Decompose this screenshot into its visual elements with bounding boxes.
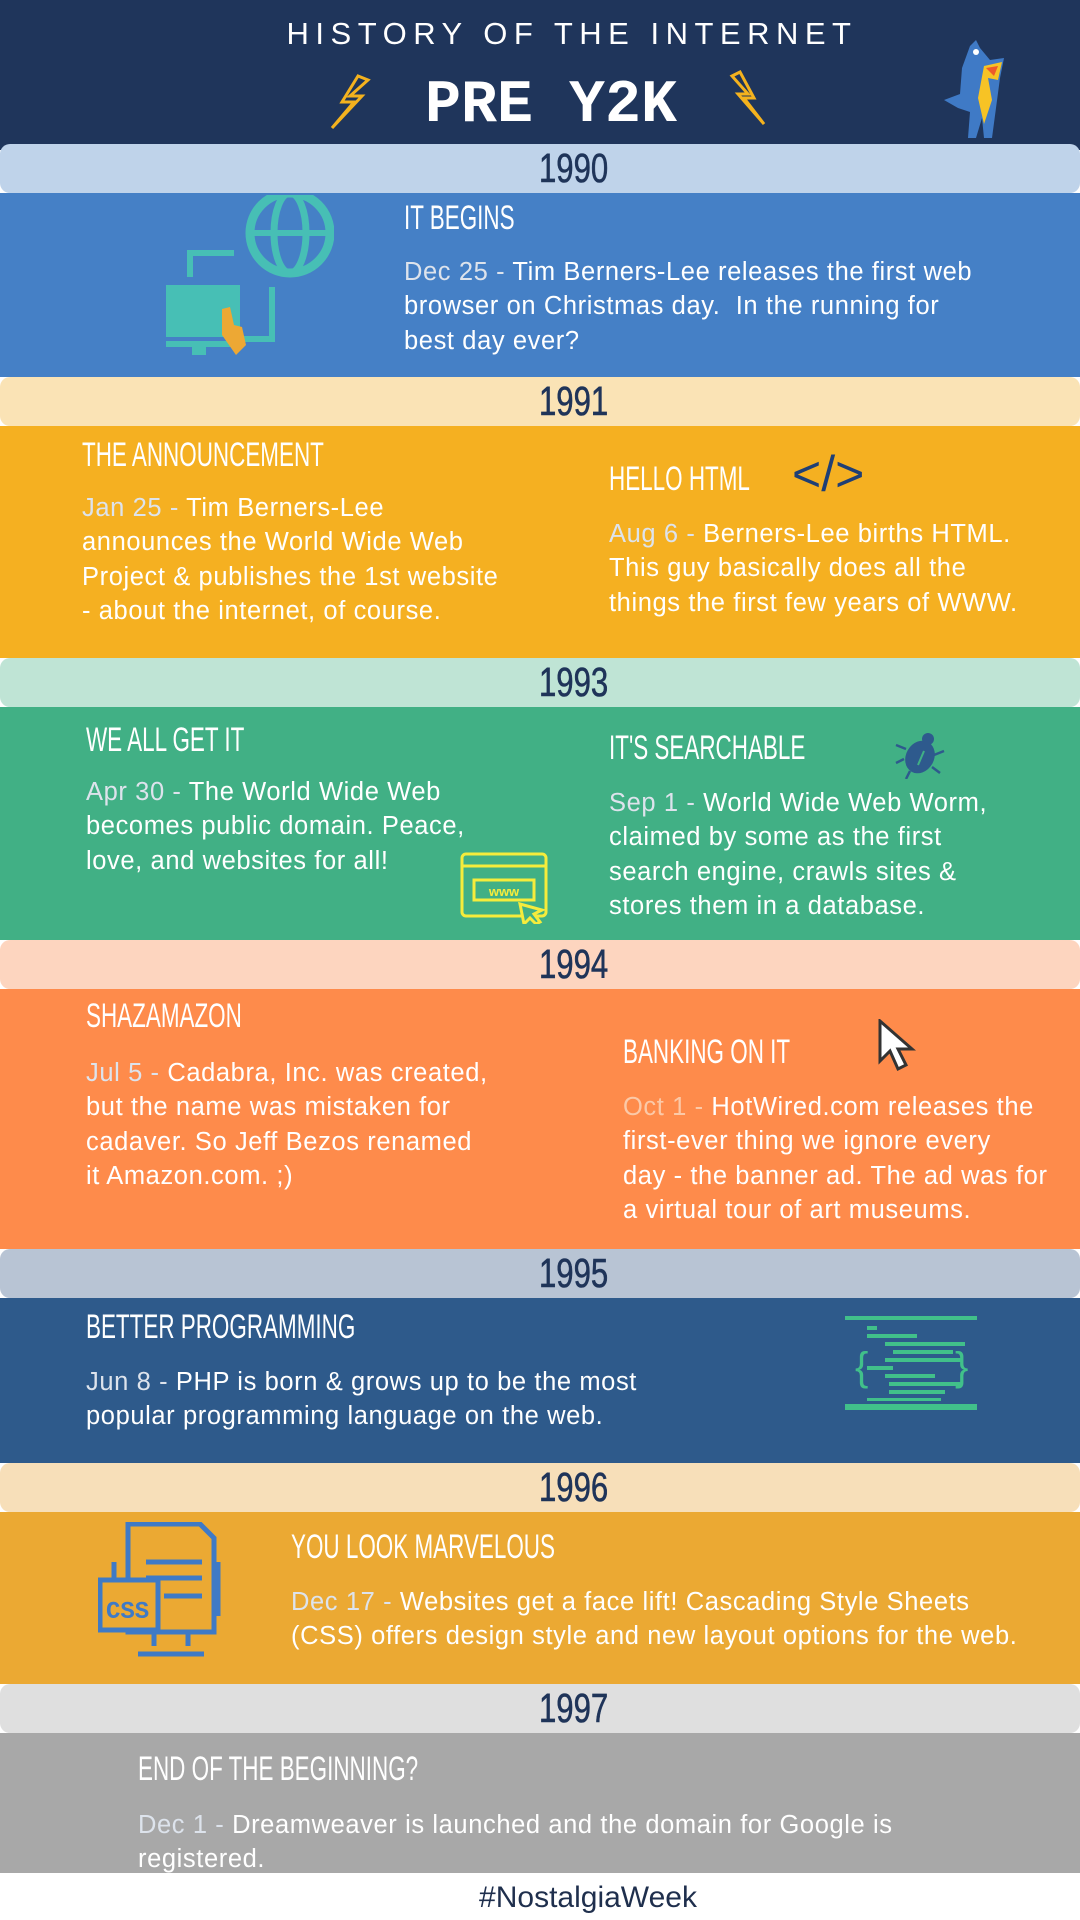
text block: announcement <box>82 494 498 625</box>
footer hashtag: #NostalgiaWeek <box>479 1881 697 1914</box>
text block: html: things the first few years of WWW. <box>609 589 1018 617</box>
heading: end of the beginning: END OF THE BEGINNING? <box>138 1750 418 1788</box>
icon: bug <box>896 733 944 779</box>
text block: banner ad <box>623 1093 1048 1224</box>
band: 1990: 1990 <box>539 145 609 191</box>
icon: cursor <box>878 1019 916 1071</box>
title: HISTORY OF THE INTERNET <box>287 16 857 51</box>
band: 1996 <box>0 1463 1080 1512</box>
panel: 1995 <box>0 1298 1080 1463</box>
band: 1991 <box>0 377 1080 426</box>
icon: www browser <box>460 852 548 924</box>
text block: dreamweaver <box>138 1811 893 1873</box>
heading: the announcement: THE ANNOUNCEMENT <box>82 436 324 474</box>
icon: code editor: } <box>955 1345 968 1389</box>
band: 1990 <box>0 144 1080 193</box>
text block: banner ad: a virtual tour of art museums. <box>623 1196 971 1224</box>
heading: shazamazon: SHAZAMAZON <box>86 997 242 1035</box>
heading: it's searchable: IT'S SEARCHABLE <box>609 729 805 767</box>
heading: we all get it: WE ALL GET IT <box>86 721 244 759</box>
icon: lightning left <box>330 74 371 129</box>
text block: announcement: - about the internet, of course. <box>82 597 441 625</box>
text block: css <box>291 1588 1017 1650</box>
text block: public domain: Apr 30 - The World Wide Web <box>86 778 441 806</box>
text block: css: (CSS) offers design style and new layout options for the web. <box>291 1622 1017 1650</box>
text block: banner ad: first-ever thing we ignore every <box>623 1127 991 1155</box>
icon: code editor: { <box>855 1345 868 1389</box>
band: 1997 <box>0 1684 1080 1733</box>
text block: amazon: it Amazon.com. ;) <box>86 1162 293 1190</box>
text block: html <box>609 520 1018 617</box>
heading: better programming: BETTER PROGRAMMING <box>86 1308 355 1346</box>
text block: web worm: search engine, crawls sites & <box>609 858 957 886</box>
text block: dreamweaver: Dec 1 - Dreamweaver is launched and the domain for Google is <box>138 1811 893 1839</box>
text block: 1990: browser on Christmas day. In the running for <box>404 292 939 320</box>
panel: 1996 <box>0 1512 1080 1684</box>
text block: amazon: cadaver. So Jeff Bezos renamed <box>86 1128 472 1156</box>
text block: public domain: becomes public domain. Peace, <box>86 812 465 840</box>
text block: announcement: announces the World Wide Web <box>82 528 464 556</box>
text block: announcement: Project & publishes the 1st website <box>82 563 498 591</box>
panel: 1993 <box>0 707 1080 940</box>
band: 1996: 1996 <box>539 1464 609 1510</box>
icon: code editor <box>845 1316 977 1410</box>
text block: banner ad: day - the banner ad. The ad was for <box>623 1162 1048 1190</box>
band: 1991: 1991 <box>539 378 609 424</box>
icon: www browser: www <box>488 884 520 899</box>
text block: dreamweaver: registered. <box>138 1845 265 1873</box>
band: 1997: 1997 <box>539 1685 609 1731</box>
band: 1993 <box>0 658 1080 707</box>
text block: html: Aug 6 - Berners-Lee births HTML. <box>609 520 1011 548</box>
icon: css document <box>98 1522 220 1656</box>
header <box>0 0 1080 150</box>
text block: amazon: Jul 5 - Cadabra, Inc. was created, <box>86 1059 488 1087</box>
icon: mascot <box>944 40 1004 138</box>
text block: web worm: claimed by some as the first <box>609 823 942 851</box>
text block: banner ad: Oct 1 - HotWired.com releases the <box>623 1093 1034 1121</box>
text block: web worm: Sep 1 - World Wide Web Worm, <box>609 789 987 817</box>
panel: 1997 <box>0 1733 1080 1873</box>
text block: web worm <box>609 789 987 920</box>
panel: 1994 <box>0 989 1080 1249</box>
text block: announcement: Jan 25 - Tim Berners-Lee <box>82 494 384 522</box>
text block: css: Dec 17 - Websites get a face lift! Cascading Style Sheets <box>291 1588 970 1616</box>
icon: lightning right <box>730 70 766 125</box>
icon: computer and globe <box>166 195 334 355</box>
band: 1994: 1994 <box>539 941 609 987</box>
heading: banking on it: BANKING ON IT <box>623 1033 790 1071</box>
panel: 1990 <box>0 193 1080 377</box>
band: 1995: 1995 <box>539 1250 609 1296</box>
text block: public domain <box>86 778 465 875</box>
heading: you look marvelous: YOU LOOK MARVELOUS <box>291 1528 555 1566</box>
heading: it begins: IT BEGINS <box>404 199 515 237</box>
icon: code tag: </> <box>792 446 864 502</box>
text block: amazon <box>86 1059 488 1190</box>
text block: php: Jun 8 - PHP is born & grows up to be the most <box>86 1368 637 1396</box>
text block: public domain: love, and websites for all! <box>86 847 389 875</box>
text block: amazon: but the name was mistaken for <box>86 1093 451 1121</box>
text block: 1990: best day ever? <box>404 327 580 355</box>
subtitle: pre y2k: PRE Y2K <box>425 72 677 140</box>
band: 1994 <box>0 940 1080 989</box>
band: 1995 <box>0 1249 1080 1298</box>
band: 1993: 1993 <box>539 659 609 705</box>
icon: css document: CSS <box>106 1599 149 1626</box>
text block: html: This guy basically does all the <box>609 554 966 582</box>
text block: 1990 <box>404 258 972 355</box>
heading: hello html: HELLO HTML <box>609 460 750 498</box>
text block: php <box>86 1368 637 1430</box>
text block: php: popular programming language on the web. <box>86 1402 603 1430</box>
text block: web worm: stores them in a database. <box>609 892 925 920</box>
text block: 1990: Dec 25 - Tim Berners-Lee releases the first web <box>404 258 972 286</box>
panel: 1991 <box>0 426 1080 658</box>
